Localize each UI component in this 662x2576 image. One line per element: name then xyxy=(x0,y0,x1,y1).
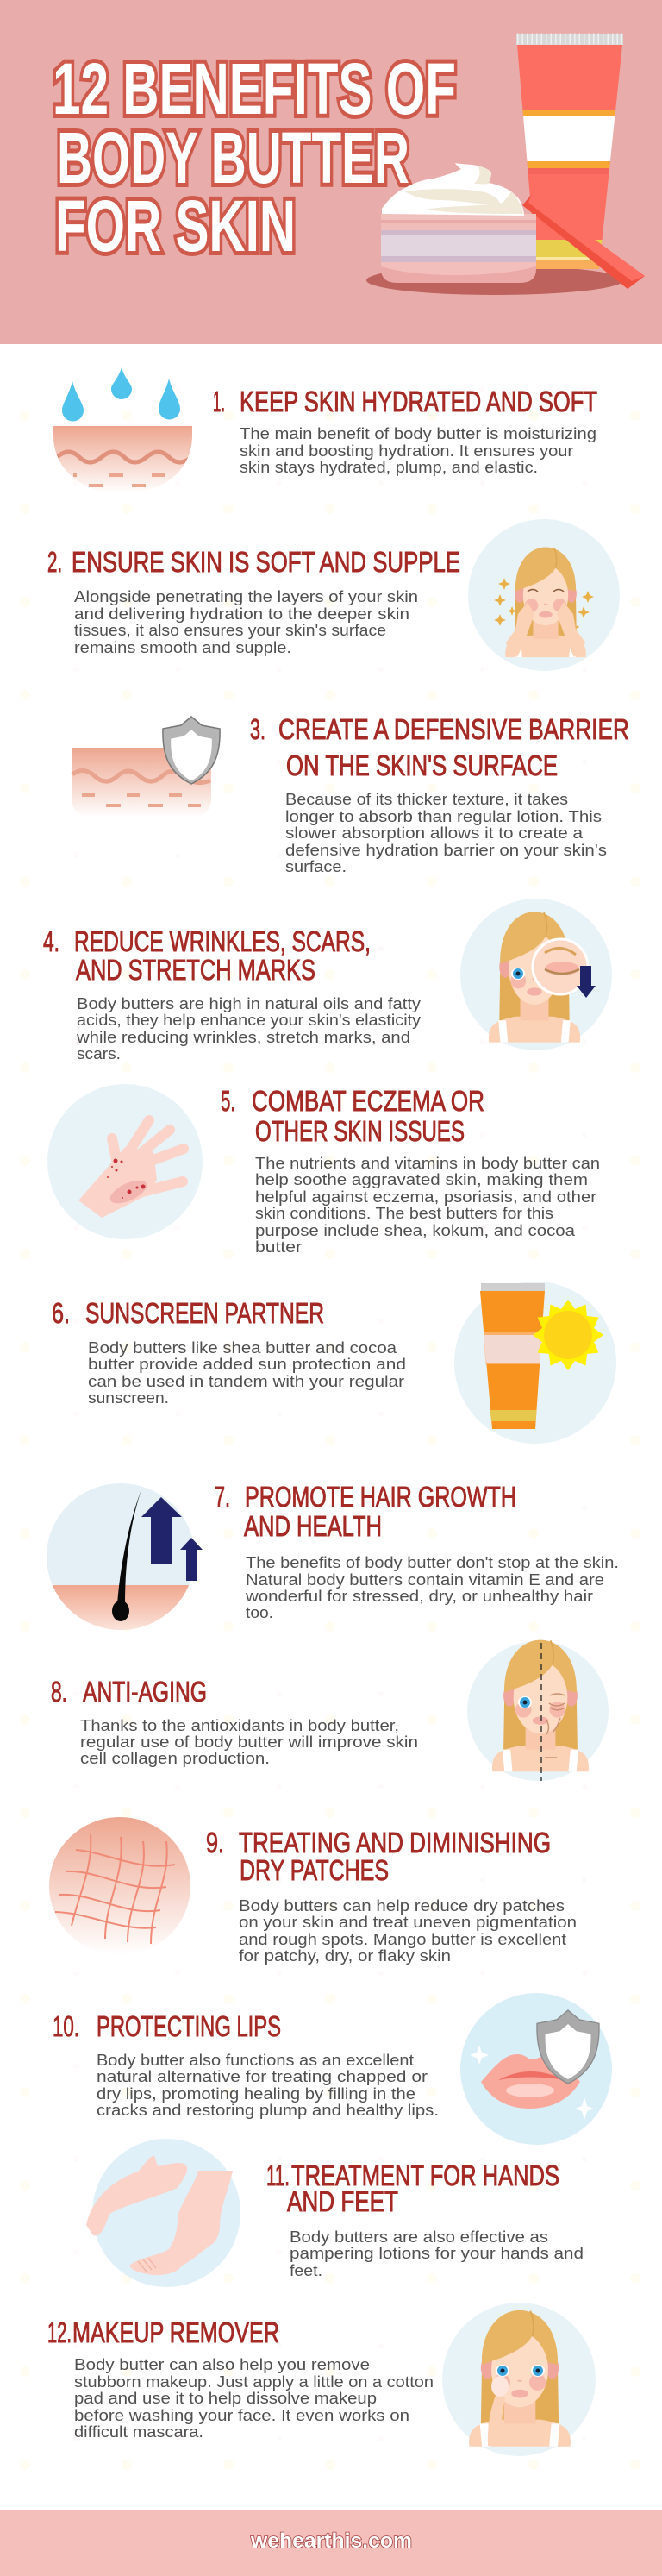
text block: skin conditions. The best butters for this xyxy=(255,1204,553,1222)
text block xyxy=(285,790,607,875)
text block xyxy=(88,1338,406,1407)
heading: 4. xyxy=(43,925,59,957)
text block: pad and use it to help dissolve makeup xyxy=(74,2389,377,2407)
heading xyxy=(53,2010,281,2042)
benefit 10 xyxy=(53,1993,612,2145)
heading: 11. xyxy=(266,2159,290,2191)
text block: Body butters are high in natural oils and fatty xyxy=(77,994,422,1012)
heading xyxy=(250,713,629,781)
icon: woman half young half aged xyxy=(467,1640,609,1781)
text block: butter provide added sun protection and xyxy=(88,1355,406,1373)
text block: before washing your face. It even works on xyxy=(74,2406,409,2424)
benefit 7 xyxy=(43,1481,619,1632)
title: BODY BUTTER xyxy=(57,117,409,198)
text block: Because of its thicker texture, it takes xyxy=(285,790,568,808)
benefit 5 xyxy=(47,1084,600,1256)
text block: sunscreen. xyxy=(88,1388,169,1407)
text block: surface. xyxy=(285,857,347,875)
text block: purpose include shea, kokum, and cocoa xyxy=(255,1221,576,1239)
footer band xyxy=(0,2510,662,2576)
heading: OTHER SKIN ISSUES xyxy=(255,1115,465,1147)
heading: 10. xyxy=(53,2010,79,2042)
heading: SUNSCREEN PARTNER xyxy=(85,1297,324,1329)
text block: slower absorption allows it to create a xyxy=(285,824,584,842)
text block xyxy=(74,2355,434,2441)
heading: 6. xyxy=(52,1297,70,1329)
text block: and delivering hydration to the deeper skin xyxy=(74,605,409,623)
text block: helpful against eczema, psoriasis, and other xyxy=(255,1188,596,1206)
text block xyxy=(245,1553,619,1621)
text block xyxy=(240,424,596,476)
heading: REDUCE WRINKLES, SCARS, xyxy=(74,925,371,957)
benefit 4 xyxy=(43,899,612,1062)
text block: cracks and restoring plump and healthy lips. xyxy=(97,2101,439,2119)
heading: ANTI-AGING xyxy=(83,1676,207,1708)
text block: too. xyxy=(246,1603,273,1621)
heading: TREATING AND DIMINISHING xyxy=(239,1827,551,1858)
icon: lips with shield xyxy=(460,1993,612,2145)
text block: feet. xyxy=(290,2261,322,2279)
text block: The benefits of body butter don't stop at the skin. xyxy=(246,1553,619,1571)
text block xyxy=(76,994,422,1062)
icon: hand with eczema xyxy=(47,1084,203,1239)
icon: woman removing makeup xyxy=(442,2303,596,2456)
text block: can be used in tandem with your regular xyxy=(88,1372,404,1390)
text block: remains smooth and supple. xyxy=(74,638,291,656)
benefit 3 xyxy=(72,713,629,875)
heading: PROTECTING LIPS xyxy=(97,2010,281,2042)
heading xyxy=(266,2159,559,2217)
icon: sunscreen tube and sun xyxy=(454,1282,616,1444)
text block: natural alternative for treating chapped or xyxy=(97,2067,428,2085)
icon: woman with magnified wrinkles and down arrow xyxy=(460,899,612,1050)
text block: help soothe aggravated skin, making them xyxy=(255,1170,588,1188)
text block: Body butter can also help you remove xyxy=(74,2355,370,2373)
heading: ON THE SKIN'S SURFACE xyxy=(286,749,558,781)
benefit 9 xyxy=(49,1817,577,1965)
text block xyxy=(97,2051,439,2119)
text block: tissues, it also ensures your skin's surface xyxy=(74,621,386,639)
heading: AND STRETCH MARKS xyxy=(76,954,315,986)
heading xyxy=(206,1827,551,1886)
footer website label: wehearthis.com xyxy=(250,2529,412,2553)
icon: hair growth xyxy=(43,1483,203,1632)
benefit 12 xyxy=(47,2303,596,2456)
heading xyxy=(43,925,371,986)
text block: difficult mascara. xyxy=(74,2422,203,2441)
text block: wonderful for stressed, dry, or unhealthy hair xyxy=(245,1587,593,1605)
title: 12 BENEFITS OF xyxy=(53,48,456,129)
heading xyxy=(52,1297,324,1329)
heading: 7. xyxy=(215,1481,230,1513)
text block: skin and boosting hydration. It ensures your xyxy=(240,442,573,460)
text block: regular use of body butter will improve skin xyxy=(80,1733,418,1751)
icon: woman with glowing skin xyxy=(468,519,620,671)
text block: and rough spots. Mango butter is excellent xyxy=(239,1930,566,1948)
illustration: body butter jar and tube xyxy=(366,34,645,295)
heading: AND FEET xyxy=(287,2185,398,2217)
heading: 3. xyxy=(250,713,265,745)
heading xyxy=(215,1481,516,1542)
header banner xyxy=(0,0,662,344)
text block: stubborn makeup. Just apply a little on a cotton xyxy=(74,2372,434,2391)
benefit 11 xyxy=(86,2139,584,2287)
icon: water drops on skin xyxy=(53,367,192,493)
text block: defensive hydration barrier on your skin's xyxy=(285,841,607,859)
text block: on your skin and treat uneven pigmentation xyxy=(239,1913,577,1931)
text block: Alongside penetrating the layers of your skin xyxy=(74,587,418,605)
benefit 2 xyxy=(47,519,620,671)
text block: skin stays hydrated, plump, and elastic. xyxy=(240,458,538,476)
text block xyxy=(255,1154,600,1256)
icon: skin with shield xyxy=(72,717,220,818)
text block: Body butters like shea butter and cocoa xyxy=(88,1338,397,1357)
heading: 5. xyxy=(221,1085,235,1117)
benefit 1 xyxy=(53,367,597,493)
text block: for patchy, dry, or flaky skin xyxy=(239,1946,451,1965)
heading: 2. xyxy=(47,546,62,578)
heading: PROMOTE HAIR GROWTH xyxy=(245,1481,516,1513)
benefit 6 xyxy=(52,1282,616,1444)
text block: Thanks to the antioxidants in body butter, xyxy=(80,1716,399,1734)
heading: ENSURE SKIN IS SOFT AND SUPPLE xyxy=(72,546,460,578)
icon: hand and foot xyxy=(86,2139,240,2287)
text block: The main benefit of body butter is moisturizing xyxy=(240,424,596,442)
text block: acids, they help enhance your skin's elasticity xyxy=(77,1011,422,1029)
heading: 12. xyxy=(47,2316,72,2348)
heading: COMBAT ECZEMA OR xyxy=(252,1085,484,1117)
heading xyxy=(51,1676,207,1708)
text block xyxy=(239,1896,577,1965)
heading: 8. xyxy=(51,1676,67,1708)
title xyxy=(53,48,456,266)
text block xyxy=(290,2228,584,2279)
heading: MAKEUP REMOVER xyxy=(72,2316,279,2348)
heading xyxy=(221,1085,484,1147)
text block: pampering lotions for your hands and xyxy=(290,2244,584,2262)
title: FOR SKIN xyxy=(55,185,296,266)
text block: longer to absorb than regular lotion. This xyxy=(285,807,602,825)
text block: Body butter also functions as an excellent xyxy=(97,2051,414,2069)
heading: AND HEALTH xyxy=(244,1510,382,1542)
text block: cell collagen production. xyxy=(80,1749,270,1767)
text block: scars. xyxy=(77,1044,121,1062)
text block: while reducing wrinkles, stretch marks, and xyxy=(76,1028,410,1046)
text block: Natural body butters contain vitamin E and are xyxy=(246,1570,604,1589)
text block: Body butters are also effective as xyxy=(290,2228,548,2246)
text block: Body butters can help reduce dry patches xyxy=(239,1896,565,1915)
text block xyxy=(80,1716,418,1767)
benefit 8 xyxy=(51,1640,609,1781)
heading: TREATMENT FOR HANDS xyxy=(291,2159,559,2191)
heading: DRY PATCHES xyxy=(240,1854,389,1886)
heading: 1. xyxy=(213,385,225,417)
text block xyxy=(74,587,418,656)
text block: The nutrients and vitamins in body butter can xyxy=(255,1154,600,1172)
heading: 9. xyxy=(206,1827,224,1858)
text block: butter xyxy=(255,1238,302,1256)
text block: dry lips, promoting healing by filling in the xyxy=(97,2084,415,2103)
icon: dry skin patch xyxy=(49,1817,190,1955)
heading xyxy=(47,2316,279,2348)
